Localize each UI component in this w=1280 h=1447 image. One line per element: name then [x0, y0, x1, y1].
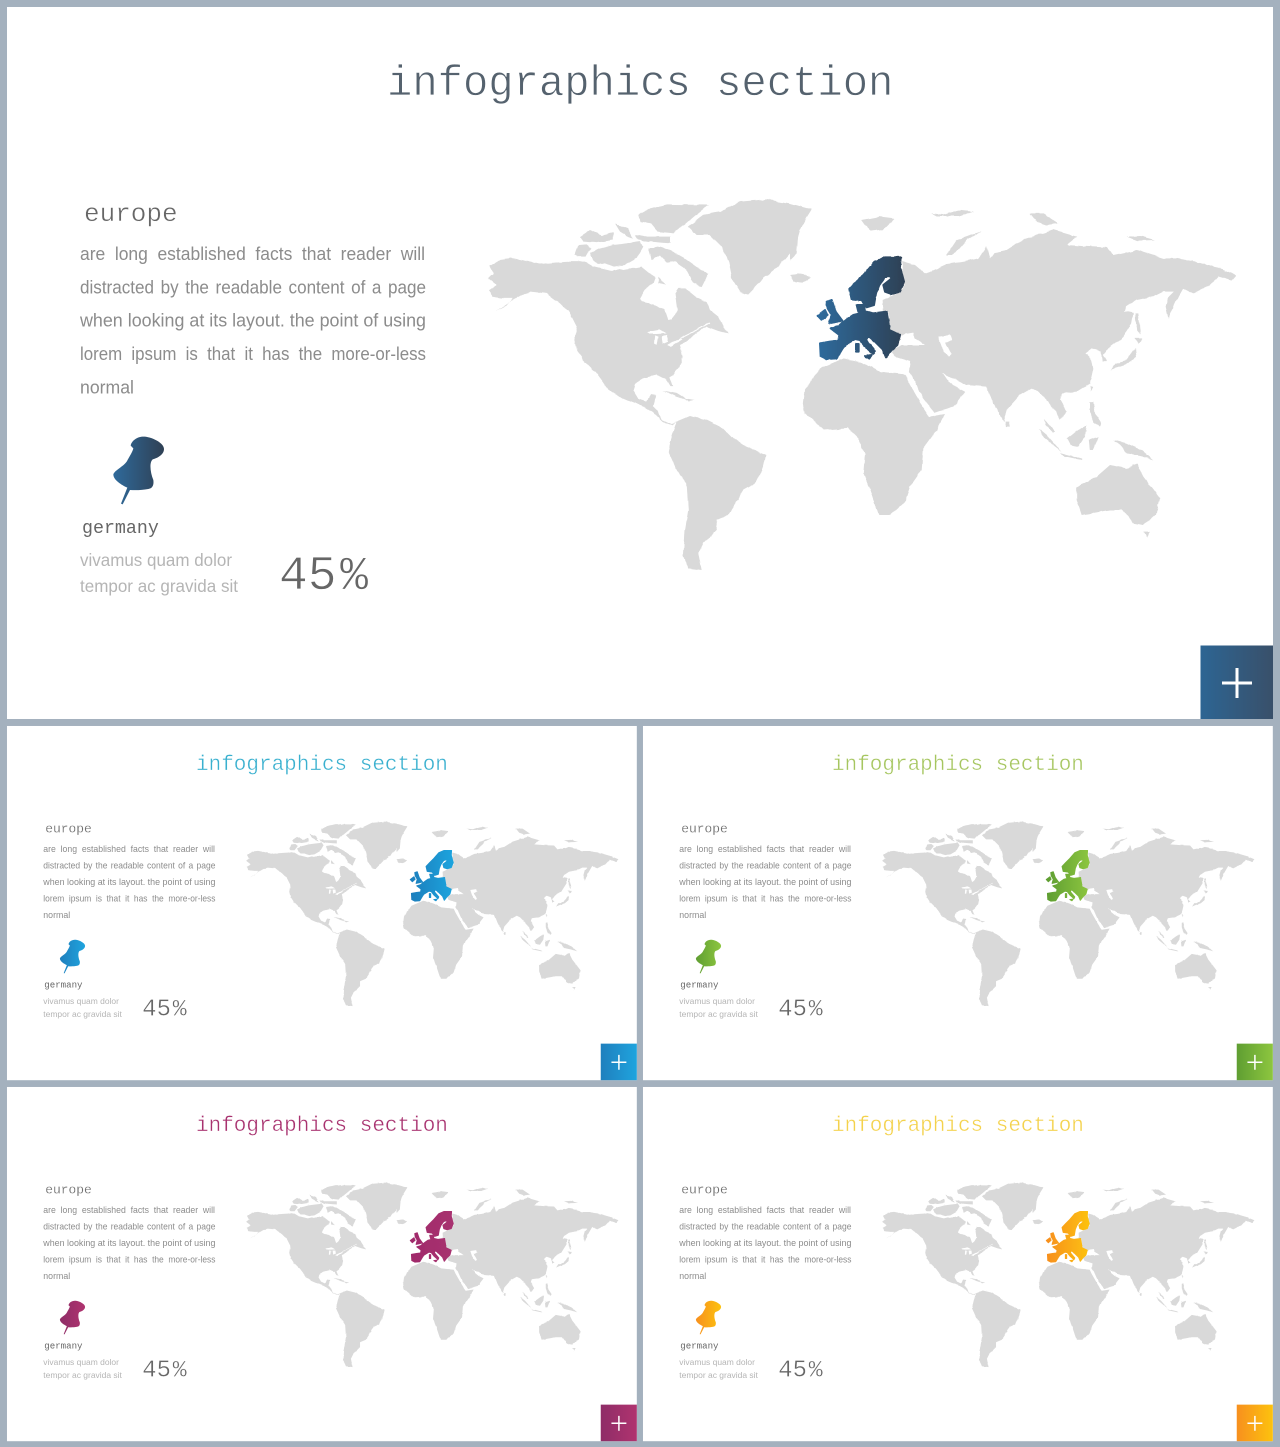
heading: europe: europe [681, 821, 728, 836]
stat: 45%: % [809, 998, 824, 1024]
body text: lorem ipsum is that it has the more-or-less [43, 894, 216, 904]
label: germany: germany [82, 519, 159, 539]
body text: are long established facts that reader will [43, 844, 215, 854]
body text: lorem ipsum is that it has the more-or-less [43, 1255, 216, 1265]
plus button [1237, 1405, 1273, 1441]
title: infographics section [387, 60, 893, 108]
body text: lorem ipsum is that it has the more-or-less [80, 343, 426, 364]
title: infographics section [196, 754, 448, 777]
map highlight: europe [410, 851, 453, 901]
body text: normal [679, 1271, 706, 1281]
body text: distracted by the readable content of a page [679, 860, 851, 870]
map highlight: europe [410, 1212, 453, 1262]
stat: 45%: % [173, 998, 188, 1024]
caption: tempor ac gravida sit [679, 1009, 758, 1019]
caption [679, 1357, 758, 1380]
caption: tempor ac gravida sit [679, 1370, 758, 1380]
world map [882, 1183, 1254, 1367]
stat: 45%: % [173, 1359, 188, 1385]
body text: when looking at its layout. the point of using [678, 877, 851, 887]
body text [678, 844, 852, 920]
stat: 45%: 45 [142, 997, 171, 1024]
body text: are long established facts that reader will [679, 844, 851, 854]
icon: push pin [696, 1301, 721, 1334]
stat: 45%: 45 [778, 1358, 807, 1385]
stat: 45%: 45 [778, 997, 807, 1024]
caption: tempor ac gravida sit [80, 576, 238, 596]
body text: distracted by the readable content of a page [679, 1221, 851, 1231]
body text [42, 1205, 216, 1281]
panel: blue slide [7, 726, 637, 1080]
label: germany: germany [680, 980, 719, 991]
body text: are long established facts that reader will [679, 1205, 851, 1215]
title: infographics section [196, 1115, 448, 1138]
caption: vivamus quam dolor [679, 1357, 755, 1367]
caption: tempor ac gravida sit [43, 1009, 122, 1019]
world map [882, 822, 1254, 1006]
panel: green slide [643, 726, 1273, 1080]
heading: europe: europe [45, 1182, 92, 1197]
body text: when looking at its layout. the point of using [79, 310, 426, 331]
caption: vivamus quam dolor [80, 550, 232, 570]
label: germany: germany [680, 1341, 719, 1352]
map highlight: europe [818, 257, 904, 359]
plus button [601, 1044, 637, 1080]
stat: 45%: 45 [142, 1358, 171, 1385]
body text: normal [679, 910, 706, 920]
body text: are long established facts that reader will [43, 1205, 215, 1215]
plus button [601, 1405, 637, 1441]
panel: yellow slide [643, 1087, 1273, 1441]
world map [246, 1183, 618, 1367]
caption: vivamus quam dolor [43, 996, 119, 1006]
caption [43, 1357, 122, 1380]
heading: europe: europe [45, 821, 92, 836]
icon: push pin [60, 1301, 85, 1334]
stat: 45%: % [809, 1359, 824, 1385]
stat: 45%: 45 [279, 550, 337, 604]
world map [246, 822, 618, 1006]
caption: vivamus quam dolor [679, 996, 755, 1006]
body text: distracted by the readable content of a page [43, 860, 215, 870]
label: germany: germany [44, 980, 83, 991]
world map [488, 199, 1236, 570]
icon: push pin [60, 940, 85, 973]
body text: distracted by the readable content of a page [43, 1221, 215, 1231]
body text: when looking at its layout. the point of using [42, 877, 215, 887]
title: infographics section [832, 1115, 1084, 1138]
body text: when looking at its layout. the point of using [678, 1238, 851, 1248]
body text [79, 243, 426, 397]
caption: tempor ac gravida sit [43, 1370, 122, 1380]
body text: when looking at its layout. the point of using [42, 1238, 215, 1248]
plus button [1237, 1044, 1273, 1080]
stat: 45%: % [340, 551, 369, 604]
heading: europe: europe [84, 199, 178, 229]
body text: distracted by the readable content of a page [80, 276, 426, 297]
body text: lorem ipsum is that it has the more-or-less [679, 1255, 852, 1265]
body text: normal [80, 376, 134, 397]
caption [80, 550, 238, 596]
icon: push pin [696, 940, 721, 973]
map highlight: europe [1046, 851, 1089, 901]
body text [42, 844, 216, 920]
map highlight: europe [1046, 1212, 1089, 1262]
title: infographics section [832, 754, 1084, 777]
caption [43, 996, 122, 1019]
icon: push pin [113, 437, 164, 504]
body text [678, 1205, 852, 1281]
body text: lorem ipsum is that it has the more-or-less [679, 894, 852, 904]
panel: main navy slide [7, 7, 1273, 719]
plus button [1200, 646, 1273, 719]
label: germany: germany [44, 1341, 83, 1352]
body text: normal [43, 910, 70, 920]
body text: normal [43, 1271, 70, 1281]
caption [679, 996, 758, 1019]
body text: are long established facts that reader will [80, 243, 425, 264]
caption: vivamus quam dolor [43, 1357, 119, 1367]
panel: magenta slide [7, 1087, 637, 1441]
heading: europe: europe [681, 1182, 728, 1197]
